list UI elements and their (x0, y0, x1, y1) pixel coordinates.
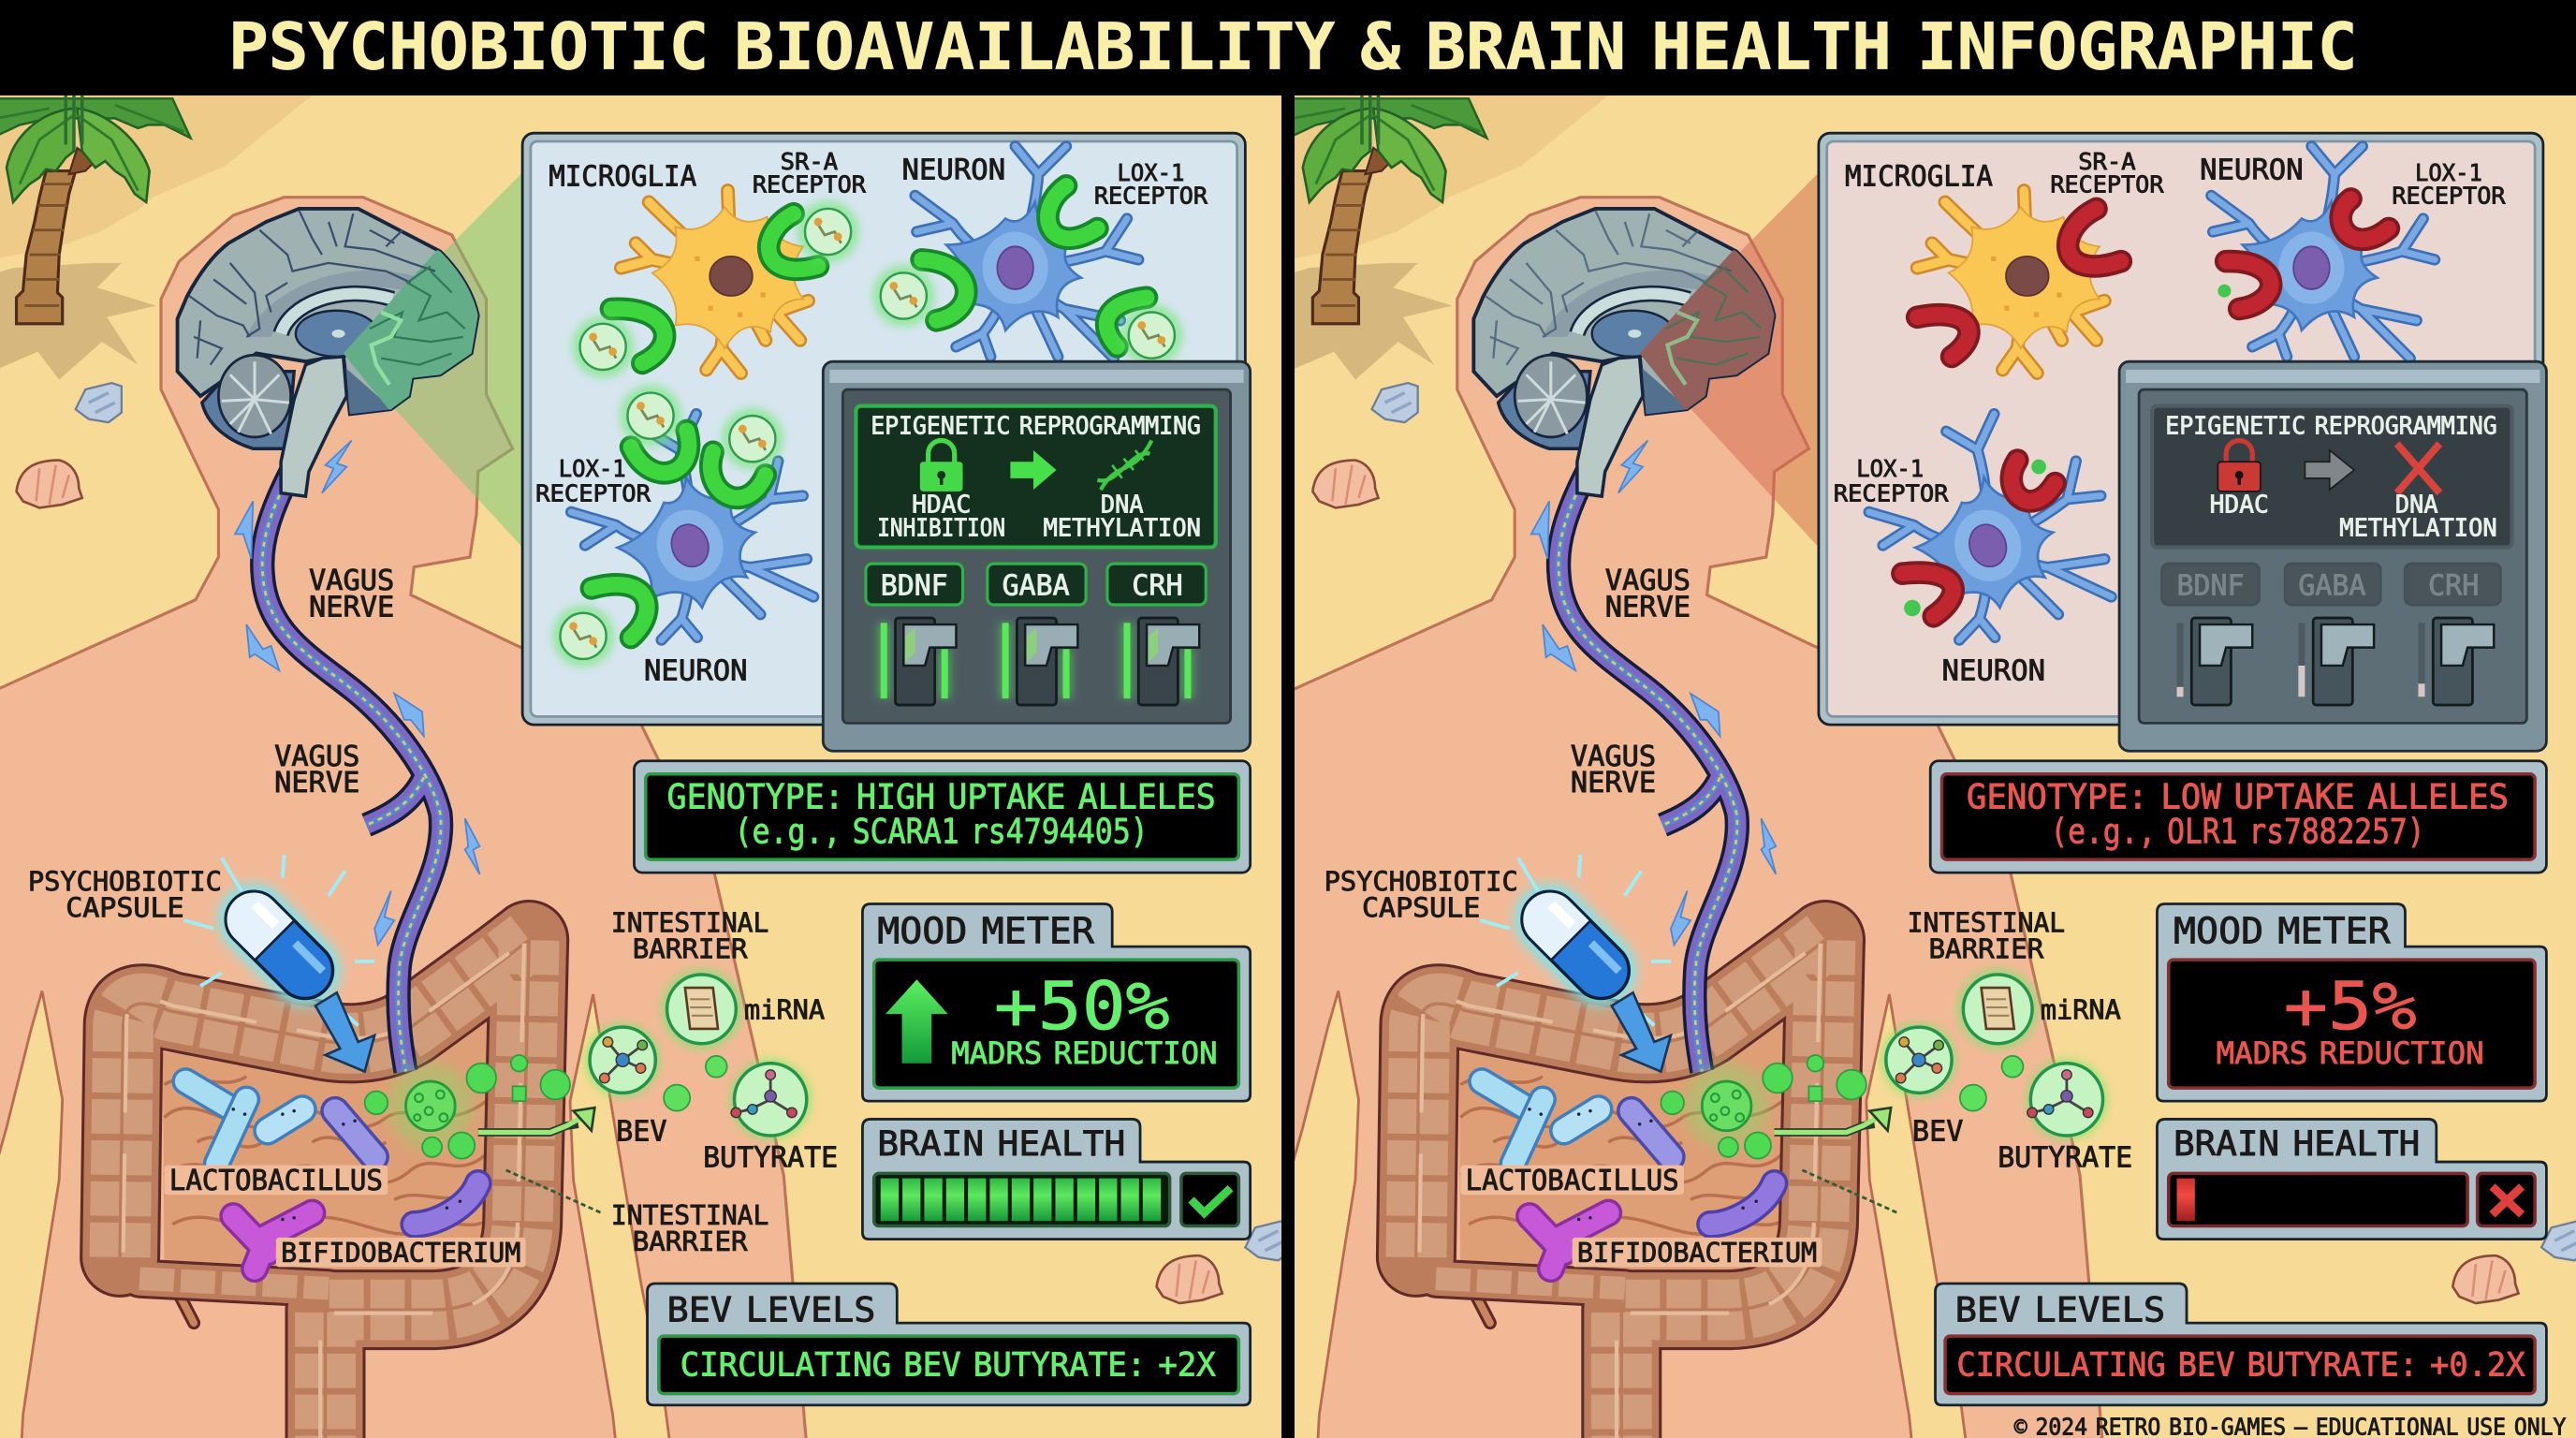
vagus nerve (262, 468, 441, 1072)
right: body labels: BEV (1912, 1115, 1963, 1148)
icon: peach shell lower (1157, 1255, 1222, 1303)
left: body labels: BEV (616, 1115, 667, 1148)
icon: blue shell (76, 383, 122, 422)
cell labels: LOX-1 (1856, 455, 1924, 482)
cell labels: RECEPTOR (753, 170, 866, 198)
nerve signal bolts (1531, 440, 1776, 945)
left: body labels: BIFIDOBACTERIUM (281, 1238, 520, 1269)
left: cellular uptake panel (522, 133, 1245, 725)
cell labels: MICROGLIA (549, 160, 696, 193)
prefrontal highlight cone (395, 174, 521, 546)
left: brain health bar (862, 1119, 1251, 1240)
epigenetic reprogramming screen: HDAC (2210, 492, 2269, 520)
icon: red X (2492, 1186, 2522, 1214)
right: genotype banner: GENOTYPE: LOW UPTAKE ALLELES (1967, 777, 2509, 817)
icon: check mark (1191, 1188, 1231, 1213)
right: epigenetic control panel (2119, 361, 2546, 751)
brain (1473, 209, 1789, 496)
right: mood meter: MOOD METER (2174, 911, 2391, 953)
icon: blue shell (1372, 383, 1418, 422)
epigenetic reprogramming screen: HDAC (912, 492, 971, 520)
right: body labels: VAGUS (1605, 565, 1690, 597)
right: BEV levels: BEV LEVELS (1955, 1289, 2165, 1329)
epigenetic reprogramming screen: DNA (1101, 492, 1144, 520)
icon: palm tree (1288, 95, 1486, 324)
cell labels: LOX-1 (559, 455, 626, 482)
right: body labels: PSYCHOBIOTIC (1325, 866, 1518, 897)
left: body labels (28, 565, 838, 1269)
icon: lower neuron (1852, 389, 2134, 665)
sparse uptake specks (1904, 285, 2231, 616)
gene buttons (866, 564, 1206, 605)
right: brain health bar (2157, 1119, 2546, 1240)
bacteria (1482, 1081, 1775, 1269)
scene shifted (1288, 95, 2576, 1438)
left: body labels: VAGUS (274, 741, 359, 773)
left: BEV levels: CIRCULATING BEV BUTYRATE: +2X (681, 1345, 1216, 1384)
right: body labels: BIFIDOBACTERIUM (1577, 1238, 1817, 1269)
icon: microglia cell (1917, 191, 2104, 373)
right: body labels: VAGUS (1571, 741, 1656, 773)
left: mood meter: MADRS REDUCTION (951, 1037, 1218, 1071)
left: mood meter: +50% (994, 968, 1170, 1045)
dimmed gene buttons (2162, 564, 2500, 605)
cargo bubbles (1881, 968, 2108, 1140)
panel: low-uptake scenario (1288, 95, 2576, 1438)
gene buttons: GABA (1003, 569, 1070, 602)
right: mood meter (2157, 903, 2546, 1101)
icon: grey arrow (2305, 450, 2354, 490)
epigenetic reprogramming screen: DNA (2395, 492, 2438, 520)
right: genotype banner (1930, 761, 2546, 873)
vesicles at receptors (552, 200, 1183, 668)
left: body labels: NERVE (309, 591, 394, 624)
dimmed gene buttons: GABA (2298, 569, 2365, 602)
epigenetic reprogramming screen: METHYLATION (1043, 514, 1201, 542)
cell labels: RECEPTOR (1094, 183, 1208, 210)
right: BEV levels: CIRCULATING BEV BUTYRATE: +0.2X (1956, 1345, 2525, 1384)
green receptors bound to vesicles (592, 185, 1147, 638)
icon: lower neuron (554, 389, 837, 665)
left: body labels: VAGUS (309, 565, 394, 597)
left: genotype banner (634, 761, 1251, 873)
cell labels (535, 148, 1208, 688)
gene buttons: BDNF (881, 569, 948, 602)
beach sand background (0, 95, 1298, 1438)
icon: peach shell (17, 461, 82, 507)
red blocked receptors (1902, 198, 2389, 616)
left: mood meter: MOOD METER (877, 911, 1095, 953)
cell labels: RECEPTOR (2392, 183, 2506, 210)
cell labels: SR-A (781, 148, 838, 175)
left: body labels: LACTOBACILLUS (169, 1165, 383, 1197)
icon: blue shell lower (2541, 1221, 2576, 1260)
psychobiotic capsule and arrow (184, 855, 374, 1072)
vagus nerve (1559, 468, 1737, 1072)
right: body labels: CAPSULE (1362, 893, 1480, 924)
right: body labels: LACTOBACILLUS (1466, 1165, 1679, 1197)
left: body labels: BARRIER (633, 1226, 748, 1257)
right: BEV levels (1936, 1284, 2546, 1405)
body silhouette (1288, 198, 2103, 1438)
cell labels: LOX-1 (1117, 159, 1184, 186)
gut (1416, 935, 1828, 1438)
icon: arrow (1010, 450, 1057, 490)
right: body labels: INTESTINAL (1908, 907, 2065, 938)
epigenetic reprogramming screen: METHYLATION (2339, 514, 2497, 542)
left: body labels: PSYCHOBIOTIC (28, 866, 222, 897)
left: BEV levels (648, 1284, 1251, 1405)
cell labels: MICROGLIA (1845, 160, 1993, 193)
cargo bubbles (585, 968, 812, 1140)
BEV vesicles crossing barrier (1661, 1055, 1897, 1213)
icon: upper neuron (2211, 146, 2435, 359)
title: PSYCHOBIOTIC BIOAVAILABILITY & BRAIN HEALTH INFOGRAPHIC (228, 10, 2358, 85)
icon: upper neuron (915, 146, 1138, 359)
health segments (881, 1179, 1161, 1221)
left: BEV levels: BEV LEVELS (667, 1289, 875, 1329)
left: body labels: miRNA (744, 994, 825, 1025)
health segment (2177, 1179, 2195, 1221)
epigenetic reprogramming screen: INHIBITION (877, 514, 1005, 542)
unlit toggle switches (2177, 618, 2494, 705)
left: body labels: BUTYRATE (703, 1141, 838, 1174)
left: brain health bar: BRAIN HEALTH (877, 1123, 1125, 1164)
nerve signal bolts (235, 440, 479, 945)
glowing toggle switches (877, 618, 1199, 705)
left: body labels: NERVE (274, 767, 359, 800)
gene buttons: CRH (1132, 569, 1183, 602)
cell labels (1834, 148, 2506, 688)
cell labels: LOX-1 (2415, 159, 2482, 186)
cell labels: NEURON (2200, 154, 2304, 186)
right: brain health bar: BRAIN HEALTH (2174, 1123, 2420, 1164)
BEV vesicles crossing barrier (365, 1055, 601, 1213)
dimmed gene buttons: BDNF (2177, 569, 2244, 602)
body silhouette (0, 198, 807, 1438)
cell labels: NEURON (644, 655, 748, 688)
panel: high-uptake scenario (0, 95, 1298, 1438)
left: mood meter (862, 903, 1251, 1101)
right: body labels: BARRIER (1928, 933, 2043, 964)
right: mood meter: MADRS REDUCTION (2217, 1037, 2484, 1071)
bacteria (185, 1081, 478, 1269)
brain (178, 209, 493, 496)
left: body labels: INTESTINAL (611, 1200, 768, 1231)
cell labels: RECEPTOR (2050, 170, 2164, 198)
epigenetic reprogramming screen: EPIGENETIC REPROGRAMMING (2165, 412, 2497, 440)
right: cellular uptake panel (1819, 133, 2543, 725)
sand gaps between torso and arms (1288, 991, 1967, 1438)
prefrontal highlight cone (1640, 172, 1819, 548)
beach sand background (1288, 95, 2576, 1438)
icon: red cross (2397, 444, 2439, 493)
right: body labels: BUTYRATE (1998, 1141, 2132, 1174)
icon: microglia cell (621, 191, 809, 373)
left: genotype banner: (e.g., SCARA1 rs4794405) (735, 812, 1149, 852)
right: body labels: NERVE (1571, 767, 1656, 800)
cell labels: NEURON (1942, 655, 2045, 688)
cell labels: RECEPTOR (535, 479, 651, 506)
cell labels: SR-A (2078, 148, 2136, 175)
right: mood meter: +5% (2284, 968, 2417, 1045)
epigenetic reprogramming screen (856, 406, 1216, 548)
left: body labels: BARRIER (633, 933, 748, 964)
psychobiotic capsule and arrow (1480, 855, 1671, 1072)
epigenetic reprogramming screen (2152, 406, 2512, 548)
icon: peach shell (1312, 461, 1379, 507)
right: body labels: NERVE (1605, 591, 1690, 624)
left: body labels: INTESTINAL (611, 907, 768, 938)
dimmed gene buttons: CRH (2428, 569, 2479, 602)
icon: peach shell lower (2452, 1255, 2519, 1303)
right: body labels: miRNA (2041, 994, 2121, 1025)
epigenetic reprogramming screen: EPIGENETIC REPROGRAMMING (871, 412, 1201, 440)
cell labels: NEURON (902, 154, 1005, 186)
left: genotype banner: GENOTYPE: HIGH UPTAKE ALLELES (667, 777, 1216, 817)
icon: blue shell lower (1244, 1220, 1281, 1262)
icon: palm tree (0, 95, 191, 324)
cell labels: RECEPTOR (1834, 479, 1949, 506)
right: body labels (1325, 565, 2132, 1269)
right: genotype banner: (e.g., OLR1 rs7882257) (2050, 812, 2425, 852)
gut (120, 935, 533, 1438)
left: body labels: CAPSULE (66, 893, 184, 924)
sand gaps between torso and arms (0, 991, 670, 1438)
left: epigenetic control panel (823, 361, 1251, 751)
icon: up arrow (886, 979, 948, 1064)
icon: lock (920, 440, 962, 492)
icon: DNA helix (1097, 440, 1151, 490)
icon: red lock (2217, 440, 2261, 492)
